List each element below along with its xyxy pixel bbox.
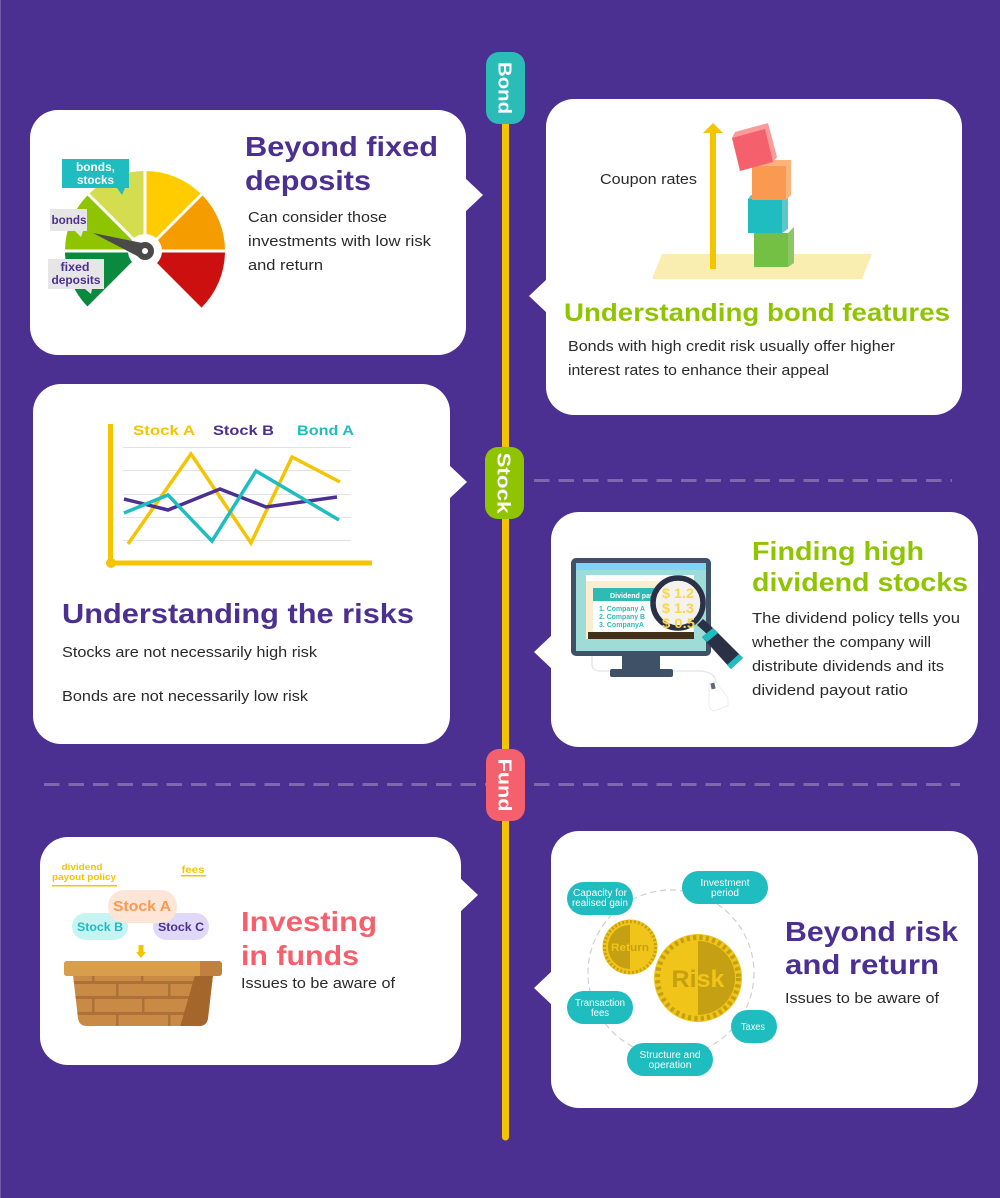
pill: transaction fees: fees (591, 1008, 609, 1019)
heading (785, 916, 958, 980)
panel: investing in funds (40, 837, 478, 1065)
label: fees: fees (182, 864, 205, 876)
timeline tag: Fund: Fund (494, 758, 514, 812)
heading: dividend stocks (752, 567, 968, 597)
body text: Issues to be aware of (785, 991, 940, 1007)
pill: structure and operation (627, 1043, 713, 1076)
heading: Beyond fixed (245, 131, 438, 162)
stacked blocks (732, 123, 794, 267)
body text: Bonds are not necessarily low risk (62, 689, 309, 705)
legend: Bond A (297, 422, 354, 438)
icon: computer with magnifier: 1. Company A (599, 606, 645, 613)
pill: investment period (682, 871, 768, 904)
legend (133, 422, 354, 438)
body text: Stocks are not necessarily high risk (62, 645, 318, 661)
pill: capacity for realised gain: realised gain (572, 898, 628, 909)
pill: transaction fees: Transaction (575, 998, 625, 1009)
body text (751, 611, 960, 699)
icon: computer with magnifier: $ 1.3 (662, 600, 694, 616)
coin: risk (654, 934, 742, 1022)
dashed orbit (588, 890, 754, 1056)
panel: understanding the risks (33, 384, 467, 744)
body text: investments with low risk (248, 234, 432, 250)
gauge label: bonds, stocks: stocks (77, 175, 114, 187)
arrow: coupon rates rising (703, 123, 723, 269)
pill: investment period: period (711, 888, 739, 899)
gauge label: bonds, stocks (62, 159, 129, 195)
panel: beyond risk and return (534, 831, 978, 1108)
body text (248, 210, 432, 274)
coin: risk: Risk (672, 966, 725, 993)
legend: Stock B (213, 422, 274, 438)
legend: Stock A (133, 422, 195, 438)
body text: and return (248, 258, 323, 274)
pill: Stock A: Stock A (113, 898, 171, 915)
icon: computer with magnifier: Dividend pay (610, 591, 655, 600)
timeline tag: Stock (485, 447, 524, 519)
gauge label: fixed deposits (48, 259, 104, 294)
body text (568, 339, 895, 379)
body text: Bonds with high credit risk usually offer higher (568, 339, 895, 355)
heading: Understanding bond features (564, 299, 950, 327)
icon: computer with magnifier: 2. Company B (599, 614, 645, 621)
body text (62, 645, 318, 705)
pill: Stock B: Stock B (77, 920, 123, 934)
body text: Issues to be aware of (241, 976, 396, 992)
panel: understanding bond features (529, 99, 962, 415)
heading: deposits (245, 165, 371, 196)
icon: computer with magnifier: $ 0.5 (662, 615, 695, 631)
gauge label: bonds (50, 209, 87, 237)
timeline (502, 110, 509, 1137)
coin: return (602, 920, 658, 974)
pill: taxes (731, 1010, 777, 1043)
pill: capacity for realised gain (567, 882, 633, 915)
heading (752, 536, 968, 597)
timeline tag: Fund (486, 749, 525, 821)
pill: Stock B (72, 913, 128, 940)
heading: Beyond risk (785, 916, 958, 947)
pill: investment period: Investment (700, 878, 750, 889)
body text: interest rates to enhance their appeal (568, 363, 829, 379)
icon: basket (64, 961, 222, 1027)
ground plane (652, 254, 872, 279)
heading: and return (785, 949, 939, 980)
pill: transaction fees (567, 991, 633, 1024)
section dividers (44, 480, 960, 784)
line chart (106, 422, 372, 568)
heading (241, 906, 377, 971)
pill: structure and operation: Structure and (640, 1050, 700, 1061)
gauge label: fixed deposits: fixed (60, 262, 90, 274)
body text: whether the company will (751, 635, 931, 651)
icon: computer with magnifier (571, 558, 743, 711)
gauge label: bonds, stocks: bonds, (76, 162, 115, 174)
timeline tag: Bond (486, 52, 525, 124)
heading: Investing (241, 906, 377, 937)
heading: in funds (241, 940, 359, 971)
timeline tag: Stock: Stock (494, 452, 514, 515)
label: dividend payout policy: dividend (62, 862, 103, 873)
heading: Finding high (752, 536, 924, 566)
arrow: into basket (136, 945, 146, 958)
pill: capacity for realised gain: Capacity for (573, 888, 628, 899)
gauge label: fixed deposits: deposits (52, 275, 100, 287)
body text: Can consider those (248, 210, 387, 226)
label: coupon rates: Coupon rates (600, 172, 697, 188)
body text: dividend payout ratio (752, 683, 908, 699)
pill: Stock A (108, 890, 177, 923)
body text: The dividend policy tells you (752, 611, 960, 627)
icon: computer with magnifier: $ 1.2 (662, 585, 694, 601)
icon: computer with magnifier: 3. CompanyA (599, 622, 644, 629)
pill: Stock C (153, 913, 209, 940)
pill: structure and operation: operation (648, 1060, 692, 1071)
label: dividend payout policy (52, 862, 117, 886)
pill: Stock C: Stock C (158, 920, 204, 934)
coin: return: Return (611, 942, 649, 954)
timeline tag: Bond: Bond (494, 62, 514, 114)
heading (245, 131, 438, 196)
panel: beyond fixed deposits (30, 110, 483, 355)
gauge label: bonds: bonds (52, 215, 86, 227)
label: dividend payout policy: payout policy (52, 872, 117, 883)
pill: taxes: Taxes (741, 1022, 765, 1033)
panel: finding high dividend stocks (534, 512, 978, 747)
body text: distribute dividends and its (752, 659, 944, 675)
heading: Understanding the risks (62, 598, 414, 629)
gauge chart (48, 159, 228, 310)
